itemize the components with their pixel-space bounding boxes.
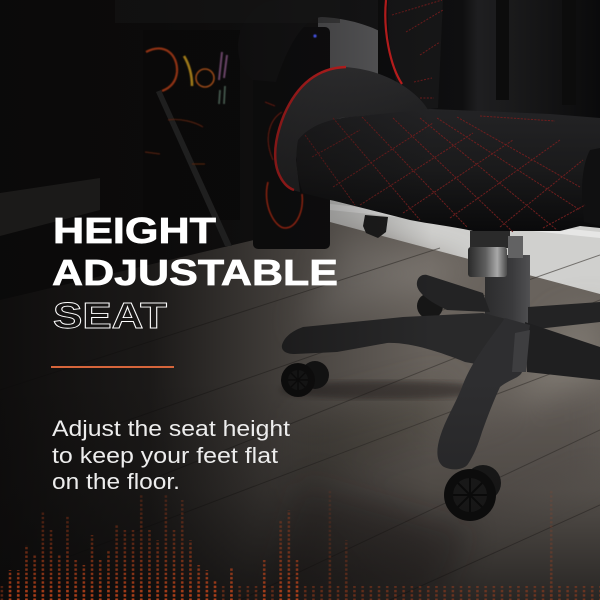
- hub highlight: [512, 330, 530, 372]
- PC tower case: [143, 27, 330, 249]
- front caster: [444, 465, 501, 521]
- wing stitching: [392, 0, 443, 98]
- orange divider: [51, 366, 174, 368]
- left wall band and desk leg: [0, 0, 340, 246]
- floor shadow under chair: [280, 381, 490, 399]
- seat bolster: [275, 67, 428, 192]
- description text: on the floor.: [52, 469, 180, 494]
- front arm: [437, 318, 530, 469]
- bolster red piping: [275, 67, 346, 190]
- floor shadow near front caster: [260, 480, 470, 600]
- equalizer dots: [0, 490, 600, 600]
- seat lever: [363, 215, 388, 238]
- seat cushion: [296, 109, 600, 232]
- seat end bulge: [582, 148, 600, 226]
- left caster: [281, 361, 329, 397]
- gas lift and collar: [468, 231, 530, 325]
- description text: [52, 416, 290, 494]
- PC RGB lights: [145, 34, 317, 228]
- title: HEIGHT: HEIGHT: [53, 210, 216, 251]
- description text: Adjust the seat height: [52, 416, 290, 441]
- description text: to keep your feet flat: [52, 443, 278, 468]
- quilted red stitching: [305, 116, 585, 232]
- five-star chair base: [282, 275, 600, 469]
- red piping on wing: [385, 0, 402, 84]
- rear arm: [417, 275, 490, 312]
- headrest arch: [238, 0, 385, 82]
- right arms: [528, 302, 600, 330]
- rear caster: [417, 293, 443, 319]
- title: SEAT outline: SEAT: [53, 295, 167, 336]
- backrest wing panel: [388, 0, 443, 112]
- chair backrest: [238, 0, 600, 118]
- title: ADJUSTABLE: ADJUSTABLE: [52, 252, 338, 293]
- wood floor: [0, 222, 600, 600]
- vertical stripes: [496, 0, 509, 100]
- left arm: [282, 313, 510, 370]
